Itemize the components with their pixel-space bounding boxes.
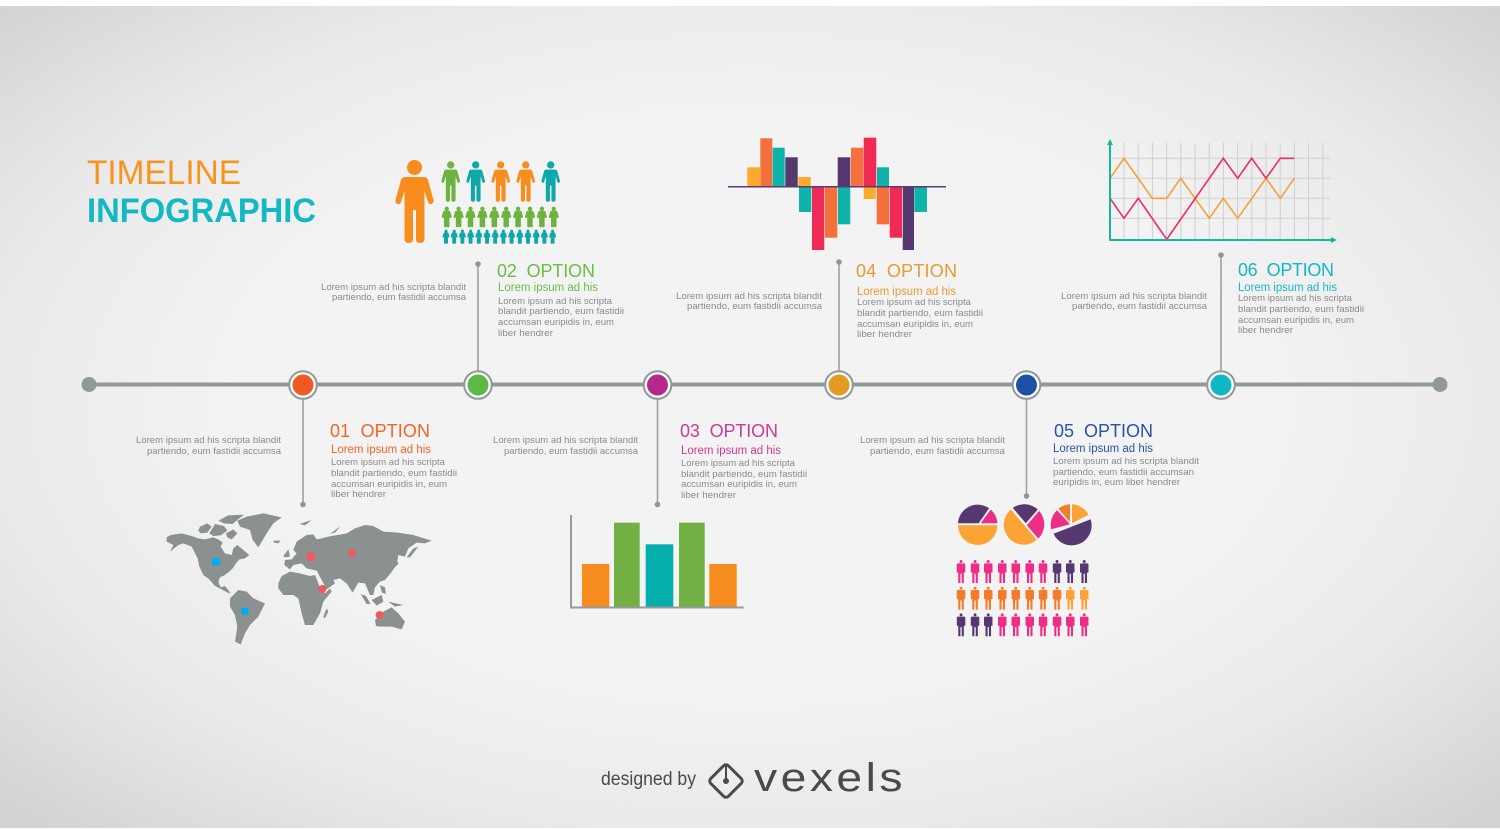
text block: option 02: Lorem ipsum ad his [498,282,598,294]
timeline node 02 [464,371,492,399]
icon: people rows [957,560,1088,636]
text block: option 05 [860,421,1199,488]
text block: option 04: 04 OPTION [856,261,957,281]
text block: option 02: accumsan euripidis in, eum [498,317,614,328]
text block: option 06: Lorem ipsum ad his scripta [1238,293,1353,304]
text block: option 04: Lorem ipsum ad his scripta blandit [676,291,822,302]
timeline node 03 [644,371,671,399]
line chart [1107,139,1337,243]
world map with location dots [167,513,432,644]
stems [300,252,1224,507]
text block: option 01: blandit partiendo, eum fastidii [331,468,457,479]
icon: people pictogram [395,160,560,244]
pie chart 2 [1004,504,1044,545]
text block: option 04: Lorem ipsum ad his [857,286,956,298]
timeline node 05 [1013,371,1040,399]
text block: option 04 [676,261,983,340]
timeline node 06 [1207,371,1235,399]
text block: option 01 [136,421,457,500]
text block: option 03: 03 OPTION [680,421,778,441]
text block: option 06: blandit partiendo, eum fastidii [1238,304,1364,315]
text block: option 06: liber hendrer [1238,325,1293,336]
pie chart 1 [958,505,997,545]
timeline node 01 [289,371,317,399]
text block: option 04: partiendo, eum fastidii accumsa [687,301,823,312]
diverging bar chart [728,138,946,250]
text block: option 02: Lorem ipsum ad his scripta blandit [321,282,466,293]
text block: option 03: Lorem ipsum ad his scripta blandit [493,435,638,446]
text block: option 03: accumsan euripidis in, eum [681,479,797,490]
text block: option 01: Lorem ipsum ad his [331,444,431,456]
text block: option 05: partiendo, eum fastidii accumsa [870,446,1006,457]
text block: option 05: Lorem ipsum ad his scripta blandit [1053,456,1199,467]
text block: option 02: liber hendrer [498,328,553,339]
text block: option 06: Lorem ipsum ad his [1238,282,1337,294]
text block: option 01: Lorem ipsum ad his scripta blandit [136,435,281,446]
text block: option 06: 06 OPTION [1238,260,1334,280]
text block: option 04: blandit partiendo, eum fastidii [857,308,983,319]
text block: option 01: partiendo, eum fastidii accumsa [147,446,282,457]
text block: option 01: Lorem ipsum ad his scripta [331,457,446,468]
text block: option 02: 02 OPTION [497,261,595,281]
text block: option 05: partiendo, eum fastidii accumsan [1053,467,1194,478]
credit: designed by vexels: vexels [754,756,906,800]
title: INFOGRAPHIC [87,192,316,230]
text block: option 06: partiendo, eum fastidii accumsa [1072,301,1208,312]
text block: option 05: 05 OPTION [1054,421,1153,441]
text block: option 03: liber hendrer [681,490,736,501]
text block: option 05: Lorem ipsum ad his scripta blandit [860,435,1005,446]
text block: option 06: Lorem ipsum ad his scripta blandit [1061,291,1207,302]
text block: option 05: euripidis in, eum liber hendrer [1053,477,1180,488]
text block: option 03: Lorem ipsum ad his scripta [681,458,796,469]
text block: option 04: Lorem ipsum ad his scripta [857,297,972,308]
text block: option 02: Lorem ipsum ad his scripta [498,296,613,307]
text block: option 02: blandit partiendo, eum fastidii [498,306,624,317]
text block: option 05: Lorem ipsum ad his [1053,443,1153,455]
text block: option 02 [321,261,624,339]
credit: designed by vexels [601,756,906,800]
text block: option 01: accumsan euripidis in, eum [331,479,447,490]
text block: option 01: 01 OPTION [330,421,430,441]
text block: option 02: partiendo, eum fastidii accumsa [332,292,467,303]
pie chart 3 [1051,504,1092,545]
title: TIMELINE [87,154,241,192]
text block: option 04: accumsan euripidis in, eum [857,319,973,330]
text block: option 03 [493,421,807,501]
text block: option 06: accumsan euripidis in, eum [1238,315,1354,326]
text block: option 03: partiendo, eum fastidii accumsa [504,446,639,457]
text block: option 03: Lorem ipsum ad his [681,445,781,457]
text block: option 01: liber hendrer [331,489,386,500]
title [87,154,316,230]
timeline axis [82,377,1448,392]
text block: option 04: liber hendrer [857,329,912,340]
credit: designed by vexels: designed by [601,769,696,790]
text block: option 03: blandit partiendo, eum fastidii [681,469,807,480]
text block: option 06 [1061,260,1364,336]
timeline node 04 [825,371,853,399]
bar chart [571,515,744,608]
